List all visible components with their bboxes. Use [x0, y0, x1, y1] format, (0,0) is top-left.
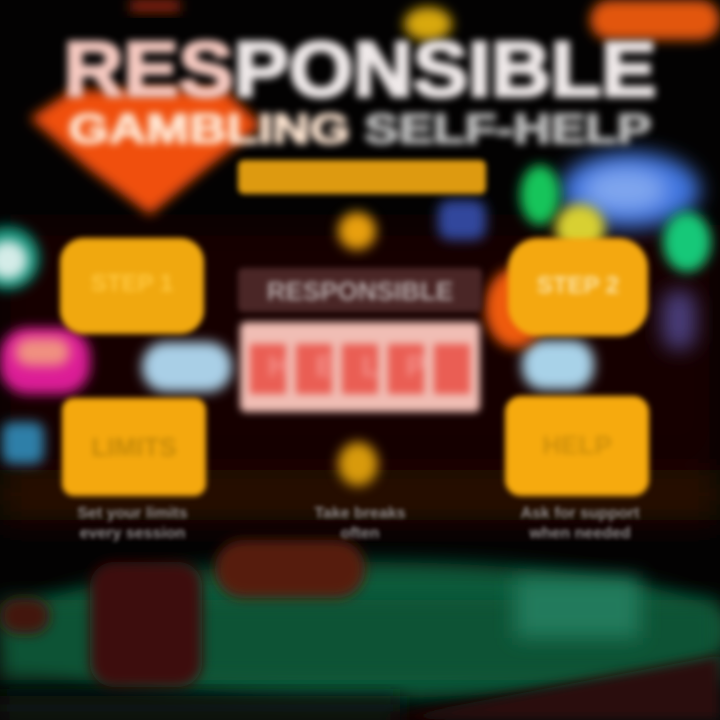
card text: STEP 1: [91, 270, 173, 297]
centre heading text: RESPONSIBLE: [267, 276, 453, 306]
subtitle banner: [238, 160, 486, 194]
title line two: GAMBLING SELF-HELP: [69, 105, 651, 152]
top red glow: [130, 0, 180, 12]
table highlight: [515, 578, 640, 638]
panel: top right card: [508, 238, 648, 336]
panel: bottom left card: [62, 398, 206, 496]
pink highlight: [15, 338, 70, 366]
left white bubble: [0, 240, 28, 280]
caption: left: every session: [80, 525, 185, 542]
yellow dot: [555, 204, 605, 252]
panel: centre red and white board: [240, 322, 480, 412]
board cell 1: [250, 344, 286, 394]
table bottom left shadow: [0, 696, 400, 720]
caption: centre: Take breaks: [314, 505, 406, 522]
card text: STEP 2: [537, 272, 619, 299]
orange glow beside right card: [485, 268, 545, 348]
title: [61, 25, 661, 152]
panel: poker table: [0, 562, 720, 720]
board cell 5: [434, 344, 470, 394]
board cell 2: [296, 344, 332, 394]
caption: centre: often: [340, 525, 380, 542]
blue square left: [2, 422, 44, 464]
caption: right: [519, 504, 642, 542]
board text: HELP: [268, 350, 452, 383]
caption: left: [76, 504, 190, 544]
blue cloud top right: [560, 152, 700, 228]
caption: centre: [312, 504, 408, 542]
green right dot: [663, 212, 711, 272]
card text: HELP: [542, 430, 612, 460]
left teal bubble: [0, 226, 40, 290]
icon: bottom connector coin: [338, 442, 378, 486]
board cell 4: [388, 344, 424, 394]
panel: centre heading: [238, 268, 482, 312]
panel: bottom right card: [505, 396, 649, 496]
caption: left: Set your limits: [77, 505, 188, 522]
caption: right: when needed: [529, 525, 631, 542]
board cell 3: [342, 344, 378, 394]
panel: top left card: [60, 238, 204, 334]
pale blue cloud right: [522, 340, 594, 390]
green left dot: [520, 165, 560, 225]
orange diamond behind title: [30, 90, 262, 215]
chip stack: left: [90, 562, 202, 687]
icon: top connector coin: [338, 212, 376, 250]
top right orange: [590, 0, 720, 40]
table felt left fill: [0, 600, 720, 680]
chip stack: far left: [0, 598, 50, 634]
title line one: RESPONSIBLE: [64, 25, 656, 113]
dark room band: [0, 225, 720, 520]
table edge brown: [380, 655, 720, 720]
card text: LIMITS: [91, 432, 177, 462]
top yellow: [404, 7, 452, 41]
caption: right: Ask for support: [520, 505, 640, 522]
pale blue cloud left: [142, 342, 232, 392]
chip stack: centre: [215, 540, 365, 598]
purple blur right: [662, 290, 696, 350]
blue badge: [438, 200, 486, 240]
table felt: [10, 562, 720, 698]
pink shape: [0, 328, 90, 394]
